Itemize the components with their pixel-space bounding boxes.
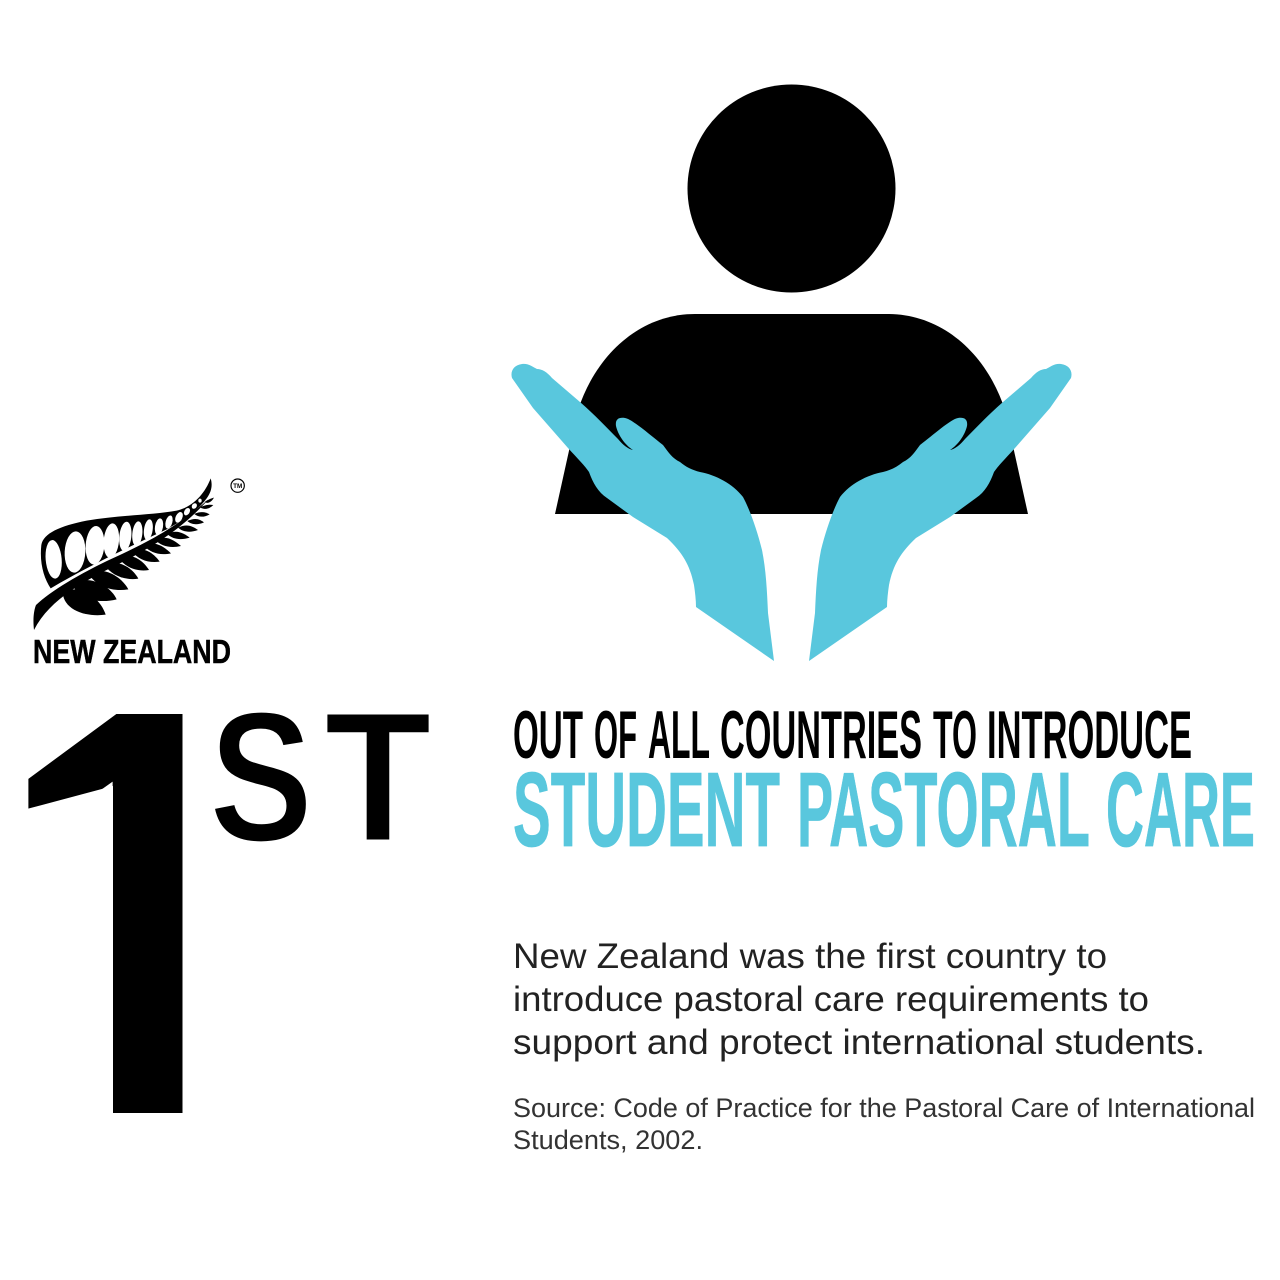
body text	[513, 937, 1205, 1062]
body text: introduce pastoral care requirements to	[513, 980, 1149, 1019]
heading line 1: OUT	[513, 697, 583, 773]
numeral 1: 1	[0, 587, 277, 1236]
icon: fern upper frond	[41, 478, 212, 588]
heading line 1: TO	[933, 697, 977, 773]
big number: 1st	[28, 712, 429, 1113]
body text: support and protect international students.	[513, 1023, 1205, 1062]
heading line 1: OF	[594, 697, 637, 773]
icon: trademark mark: TM	[233, 483, 242, 490]
heading line 1: ALL	[648, 697, 710, 773]
heading line 2	[513, 751, 1255, 869]
logo wordmark: NEW ZEALAND	[33, 633, 231, 670]
heading line 1: COUNTRIES	[720, 697, 922, 773]
icon: person head	[688, 84, 896, 292]
superscript st: S	[209, 674, 313, 881]
body text: New Zealand was the first country to	[513, 937, 1107, 976]
heading line 2: STUDENT	[513, 751, 780, 869]
icon: person with caring hands	[511, 84, 1072, 661]
logo: New Zealand fern	[33, 478, 244, 630]
icon: right hand	[809, 364, 1072, 661]
source note: Source: Code of Practice for the Pastoral Care of International	[513, 1093, 1255, 1123]
source note	[513, 1093, 1255, 1155]
icon: left hand	[511, 364, 774, 661]
icon: fern stem and lower leaflets	[33, 498, 214, 630]
superscript st: T	[324, 674, 432, 881]
heading line 1	[513, 697, 1192, 773]
source note: Students, 2002.	[513, 1125, 703, 1155]
heading	[513, 697, 1255, 869]
superscript st	[209, 674, 432, 881]
icon: person body	[555, 314, 1028, 514]
icon: trademark mark	[231, 479, 244, 492]
